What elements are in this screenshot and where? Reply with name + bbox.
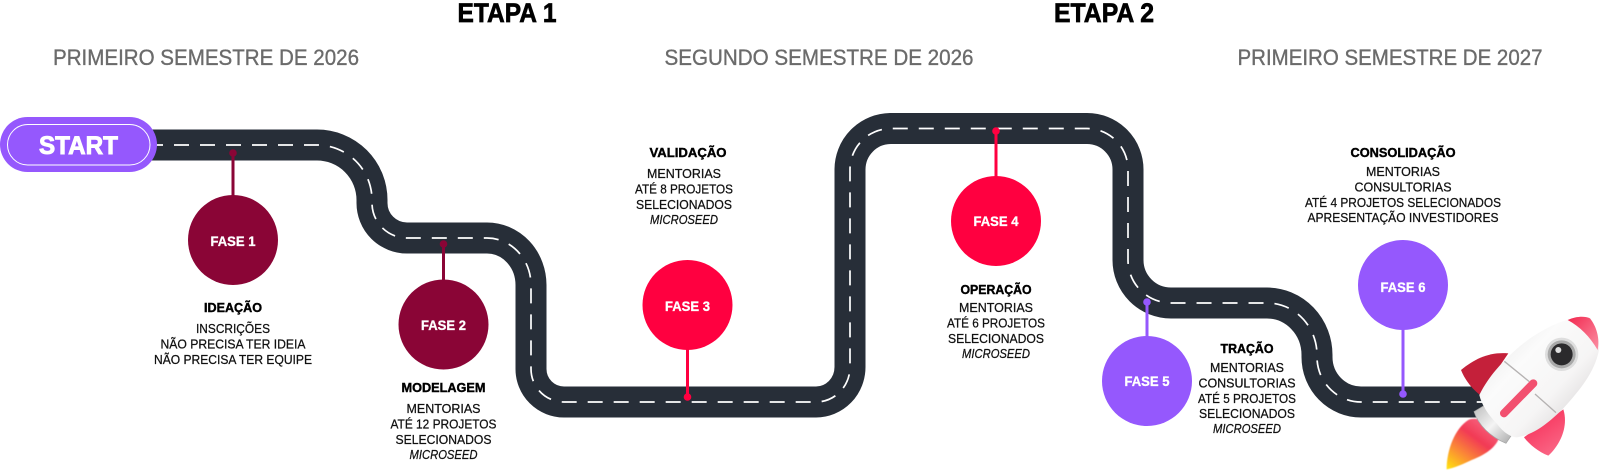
marker: fase 1: FASE 1 [210,233,256,249]
marker: fase 2 [398,240,488,370]
text: tração: TRAÇÃO [1220,341,1274,356]
icon: rocket [1447,317,1599,469]
text: operação: SELECIONADOS [948,331,1044,346]
text: validação: ATÉ 8 PROJETOS [635,182,733,196]
text: ideação: INSCRIÇÕES [196,321,270,336]
marker: fase 2: FASE 2 [421,317,466,333]
marker: fase 4: FASE 4 [974,213,1019,229]
text: operação: ATÉ 6 PROJETOS [947,316,1045,330]
text: validação: SELECIONADOS [636,197,732,212]
text: modelagem: SELECIONADOS [396,432,492,447]
phase 3 [635,145,733,401]
marker: fase 4 [951,127,1041,266]
text: tração: CONSULTORIAS [1198,376,1296,390]
phase 6 [1305,145,1501,398]
text: modelagem: MICROSEED [410,447,478,462]
text: ideação: NÃO PRECISA TER IDEIA [160,336,306,352]
text: validação [635,145,733,227]
text: tração: MICROSEED [1213,421,1281,436]
marker: fase 5 [1102,298,1192,426]
phase 4 [947,127,1045,361]
text: modelagem: ATÉ 12 PROJETOS [390,416,497,432]
text: operação: MENTORIAS [959,300,1033,315]
text: operação: MICROSEED [962,346,1030,361]
phase 2 [390,240,497,462]
text: modelagem: MENTORIAS [406,401,481,416]
marker: fase 6: FASE 6 [1380,279,1426,295]
text: consolidação: APRESENTAÇÃO INVESTIDORES [1308,210,1499,225]
marker: fase 6 [1358,240,1448,398]
text: tração: ATÉ 5 PROJETOS [1198,391,1296,406]
text: ideação: NÃO PRECISA TER EQUIPE [154,352,312,367]
marker: fase 3 [642,260,732,401]
text: consolidação: ATÉ 4 PROJETOS SELECIONADOS [1305,195,1501,210]
text: ideação [154,300,312,367]
marker: fase 3: FASE 3 [665,298,710,314]
marker: fase 1 [188,149,278,285]
text: operação [947,282,1045,361]
period label: primeiro semestre 2026: PRIMEIRO SEMESTRE DE 2026 [53,45,359,70]
text: validação: MICROSEED [650,212,718,227]
text: consolidação: CONSULTORIAS [1354,180,1452,194]
period label: segundo semestre 2026: SEGUNDO SEMESTRE DE 2026 [664,45,974,70]
marker: fase 5: FASE 5 [1124,373,1170,389]
text: consolidação: CONSOLIDAÇÃO [1350,145,1456,160]
text: consolidação: MENTORIAS [1366,164,1440,179]
text: tração: MENTORIAS [1210,360,1284,375]
text: validação: VALIDAÇÃO [650,145,727,160]
text: modelagem: MODELAGEM [402,381,486,395]
start badge: START [39,132,118,160]
text: tração [1198,341,1296,436]
text: ideação: IDEAÇÃO [204,300,262,315]
road [140,128,1490,402]
phase 1 [154,149,312,367]
text: consolidação [1305,145,1501,225]
phase 5 [1102,298,1296,436]
start badge [0,117,157,172]
period label: primeiro semestre 2027: PRIMEIRO SEMESTRE DE 2027 [1238,45,1542,70]
text: validação: MENTORIAS [647,166,721,181]
text: operação: OPERAÇÃO [960,282,1032,297]
text: modelagem [390,381,497,462]
text: tração: SELECIONADOS [1199,406,1295,421]
